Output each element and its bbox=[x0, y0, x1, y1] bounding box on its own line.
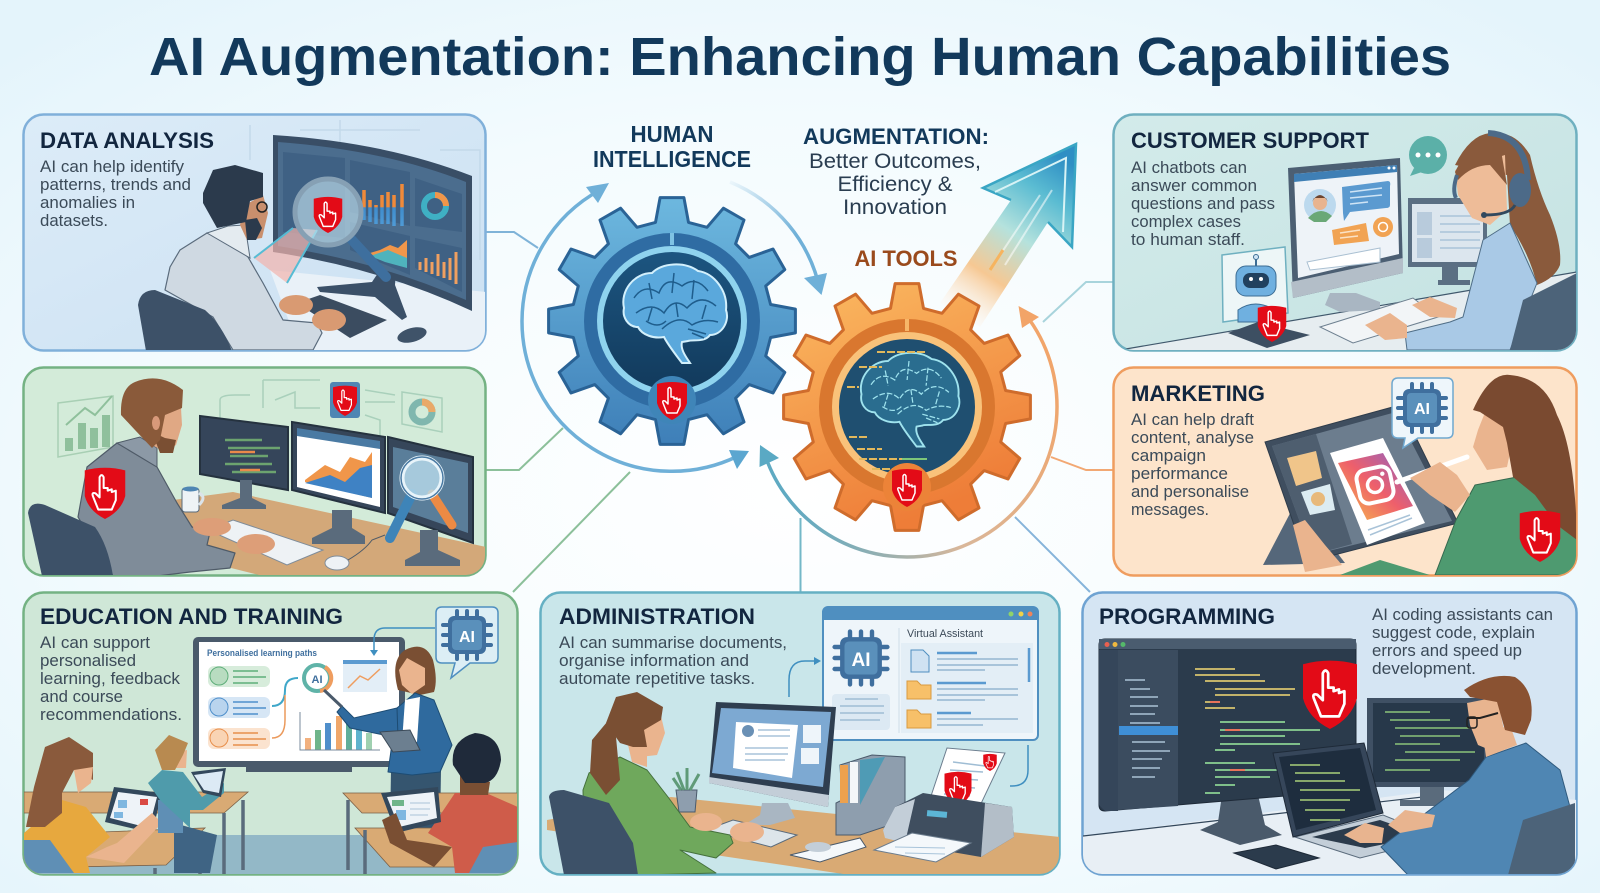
panel: data analysis bbox=[24, 114, 486, 351]
central cycle arrows bbox=[522, 182, 1057, 557]
chat bubble blue bbox=[1342, 181, 1390, 221]
heading: programming: PROGRAMMING bbox=[1099, 604, 1275, 629]
panel: analyst at three monitors bbox=[24, 368, 486, 576]
heading: data analysis: DATA ANALYSIS bbox=[40, 128, 214, 153]
text: augmentation: Innovation bbox=[843, 196, 947, 219]
text: customer support bbox=[1131, 159, 1275, 249]
text: education and training: recommendations. bbox=[40, 706, 182, 724]
text: programming: AI coding assistants can bbox=[1372, 606, 1553, 624]
icon: brain bbox=[623, 264, 727, 363]
panel: education and training bbox=[24, 592, 518, 875]
virtual assistant window bbox=[789, 607, 1038, 786]
laptop bbox=[1273, 743, 1440, 858]
code editor monitor bbox=[1099, 639, 1357, 845]
AI callout: AI bbox=[459, 629, 475, 646]
virtual assistant window: AI bbox=[852, 650, 870, 671]
classroom illustration bbox=[24, 607, 518, 875]
text: programming: development. bbox=[1372, 660, 1476, 678]
whiteboard bbox=[193, 637, 405, 772]
text: data analysis: datasets. bbox=[40, 212, 108, 230]
text: education and training: learning, feedback bbox=[40, 670, 181, 688]
badge bbox=[330, 382, 360, 418]
desks bbox=[24, 792, 518, 868]
text: data analysis bbox=[40, 158, 191, 230]
text: administration bbox=[559, 634, 787, 688]
tablet bbox=[1234, 845, 1319, 869]
faint donut bbox=[402, 392, 442, 432]
customer support illustration bbox=[1120, 133, 1577, 351]
title: AI Augmentation: Enhancing Human Capabilities bbox=[149, 27, 1451, 87]
binders bbox=[836, 755, 905, 835]
text: data analysis: patterns, trends and bbox=[40, 176, 191, 194]
heading: human intelligence bbox=[593, 121, 751, 172]
data analysis illustration bbox=[138, 120, 486, 351]
text: administration: organise information and bbox=[559, 652, 749, 670]
student left bbox=[24, 737, 162, 873]
text: data analysis: AI can help identify bbox=[40, 158, 185, 176]
magnifier bbox=[390, 457, 452, 538]
worker bbox=[549, 692, 764, 875]
text: administration: AI can summarise documents, bbox=[559, 634, 787, 652]
programmer illustration bbox=[1083, 639, 1577, 875]
student middle bbox=[148, 735, 226, 873]
text: education and training: AI can support bbox=[40, 634, 150, 652]
gear: AI tools bbox=[784, 284, 1030, 530]
text: customer support: AI chatbots can bbox=[1131, 159, 1247, 177]
heading: human intelligence: HUMAN bbox=[630, 121, 714, 147]
AI bubble bbox=[1392, 378, 1453, 448]
bars bbox=[364, 184, 402, 226]
student right bbox=[381, 733, 518, 873]
heading: administration: ADMINISTRATION bbox=[559, 604, 755, 629]
text: customer support: answer common bbox=[1131, 177, 1257, 195]
text: education and training bbox=[40, 634, 182, 724]
heading: customer support: CUSTOMER SUPPORT bbox=[1131, 128, 1370, 153]
chat bubble orange bbox=[1332, 217, 1393, 245]
programmer bbox=[1344, 676, 1575, 875]
text: customer support: questions and pass bbox=[1131, 195, 1275, 213]
text: education and training: and course bbox=[40, 688, 123, 706]
text: programming bbox=[1372, 606, 1553, 678]
speech bubble bbox=[1409, 136, 1447, 176]
whiteboard: AI bbox=[312, 674, 322, 686]
marketing illustration bbox=[1263, 375, 1577, 575]
text: administration: automate repetitive tasks. bbox=[559, 670, 755, 688]
text: customer support: complex cases bbox=[1131, 213, 1241, 231]
chat avatar bbox=[1304, 189, 1336, 222]
panel: administration bbox=[540, 592, 1060, 875]
donut chart bbox=[424, 195, 446, 217]
faint chart bbox=[58, 396, 113, 457]
whiteboard: Personalised learning paths bbox=[207, 648, 317, 659]
plant bbox=[673, 768, 699, 812]
text: marketing: campaign bbox=[1131, 447, 1206, 465]
virtual assistant window: Virtual Assistant bbox=[907, 628, 983, 640]
heading: AI tools: AI TOOLS bbox=[854, 246, 958, 271]
text: marketing: AI can help draft bbox=[1131, 411, 1254, 429]
gear: human intelligence bbox=[549, 198, 795, 444]
printer bbox=[874, 748, 1014, 862]
panel: marketing bbox=[1114, 368, 1577, 576]
panel: customer support bbox=[1114, 114, 1577, 351]
text: augmentation: AUGMENTATION: bbox=[803, 124, 989, 149]
office illustration bbox=[547, 607, 1060, 875]
text: marketing: messages. bbox=[1131, 501, 1209, 519]
area chart bbox=[370, 240, 407, 258]
connector lines bbox=[486, 232, 1113, 592]
keyboard and mousepad bbox=[706, 820, 866, 862]
AI bubble: AI bbox=[1414, 401, 1430, 418]
heading: marketing: MARKETING bbox=[1131, 381, 1265, 406]
AI callout bbox=[370, 607, 498, 678]
text: marketing: performance bbox=[1131, 465, 1228, 483]
text: augmentation bbox=[803, 124, 989, 219]
text: education and training: personalised bbox=[40, 652, 136, 670]
mug bbox=[182, 486, 203, 512]
monitor bbox=[709, 702, 836, 825]
text: customer support: to human staff. bbox=[1131, 231, 1245, 249]
teacher bbox=[324, 647, 452, 830]
text: marketing bbox=[1131, 411, 1254, 519]
panel: programming bbox=[1082, 592, 1577, 875]
heading: human intelligence: INTELLIGENCE bbox=[593, 146, 751, 172]
instagram icon bbox=[1355, 465, 1395, 505]
text: augmentation: Efficiency & bbox=[838, 173, 952, 196]
second monitor bbox=[1367, 698, 1489, 806]
text: programming: errors and speed up bbox=[1372, 642, 1522, 660]
icon: circuit brain bbox=[861, 353, 959, 446]
text: data analysis: anomalies in bbox=[40, 194, 135, 212]
text: programming: suggest code, explain bbox=[1372, 624, 1535, 642]
heading: education and training: EDUCATION AND TRAINING bbox=[40, 604, 343, 629]
text: marketing: content, analyse bbox=[1131, 429, 1254, 447]
robot card bbox=[1222, 247, 1288, 322]
text: augmentation: Better Outcomes, bbox=[809, 150, 981, 173]
arrowheads bbox=[586, 183, 1039, 469]
text: marketing: and personalise bbox=[1131, 483, 1249, 501]
arrow: augmentation upward bbox=[940, 144, 1076, 327]
